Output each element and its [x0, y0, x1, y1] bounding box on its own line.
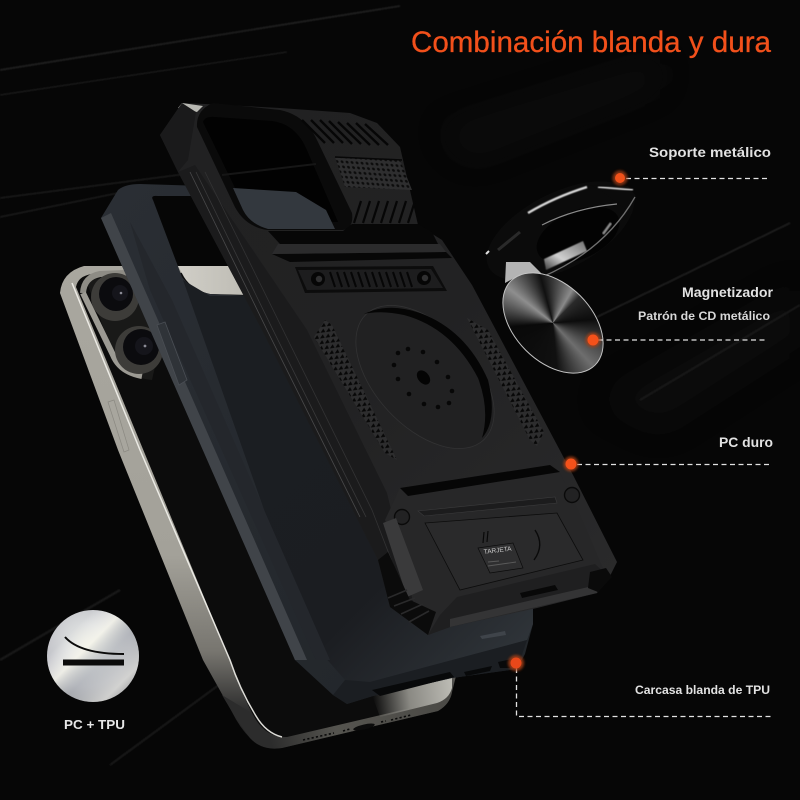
- lower plate: [385, 465, 612, 635]
- hard case body: [160, 103, 617, 635]
- silver strip seen through the case opening: [178, 266, 250, 295]
- phone body: [60, 266, 460, 749]
- black gaps under slide: [268, 224, 438, 244]
- lens top: [91, 273, 139, 321]
- hinge screws: [394, 510, 410, 524]
- stand marks: [483, 531, 488, 543]
- slide dot panel: [335, 157, 412, 190]
- corner strip and ridges: [383, 518, 423, 597]
- speaker grille: [303, 715, 411, 740]
- title: Combinación blanda y dura: [411, 26, 772, 59]
- phone back glass: [76, 272, 452, 737]
- shell left side lighter strip: [101, 213, 307, 660]
- shell back face: [183, 280, 533, 682]
- phone bottom edge: [222, 676, 452, 749]
- bottom notch: [480, 631, 506, 639]
- top edge highlight: [178, 103, 203, 112]
- bottom shine: [372, 677, 452, 717]
- badge caption: PC + TPU: [64, 717, 125, 732]
- callout: Magnetizador: [586, 285, 774, 348]
- callout: PC duro: [564, 435, 773, 472]
- callout: Carcasa blanda de TPU: Carcasa blanda de TPU: [635, 683, 770, 697]
- callout: Soporte metálico: Soporte metálico: [649, 145, 771, 160]
- soft case: blue-grey TPU shell: [101, 184, 533, 704]
- shell side band: [130, 222, 330, 660]
- callout: Soporte metálico: [612, 145, 771, 186]
- magnet dots: [392, 347, 454, 409]
- hard case: black PC shell: [160, 103, 617, 635]
- lens bottom: [115, 326, 163, 374]
- ring hole: [528, 195, 628, 275]
- ring glints: [528, 187, 587, 213]
- top rail: [295, 266, 447, 293]
- bright inner edge line: [72, 283, 282, 737]
- rail screws: [311, 272, 325, 286]
- callout: Magnetizador: Magnetizador: [682, 285, 774, 300]
- phone: titanium smartphone behind the case: [60, 266, 460, 749]
- icon: PC + TPU material badge: [47, 610, 139, 702]
- callout: Carcasa blanda de TPU: [508, 655, 772, 716]
- shell outline: [101, 184, 533, 704]
- blue case seen through opening: [233, 188, 335, 229]
- case bottom lip: [333, 640, 527, 704]
- volume button: [108, 400, 129, 452]
- callout: Magnetizador: Patrón de CD metálico: [638, 309, 770, 323]
- camera island: [83, 270, 175, 380]
- card slot label: [478, 543, 523, 573]
- CD pattern magnet disc: [483, 253, 623, 393]
- card slot label: TARJETA: [483, 546, 513, 556]
- bottom cutouts: [372, 659, 512, 696]
- side buttons: [157, 322, 187, 385]
- magnetic ring recess: [330, 280, 520, 474]
- charge port: [353, 722, 375, 732]
- right dotted grip: [467, 318, 544, 446]
- metal ring holder: [471, 161, 649, 393]
- left rail: [178, 165, 415, 610]
- hinge: [505, 262, 542, 283]
- kickstand: [425, 513, 583, 590]
- lower port band: [428, 564, 610, 635]
- centre hole: [414, 368, 433, 387]
- callout: PC duro: PC duro: [719, 435, 773, 450]
- slide lower ridges: [354, 201, 415, 223]
- slide ridges: [302, 120, 388, 145]
- rail ridges: [330, 272, 412, 287]
- left dotted grip: [314, 320, 397, 460]
- ring loop: [471, 161, 649, 301]
- camera opening: [197, 103, 352, 230]
